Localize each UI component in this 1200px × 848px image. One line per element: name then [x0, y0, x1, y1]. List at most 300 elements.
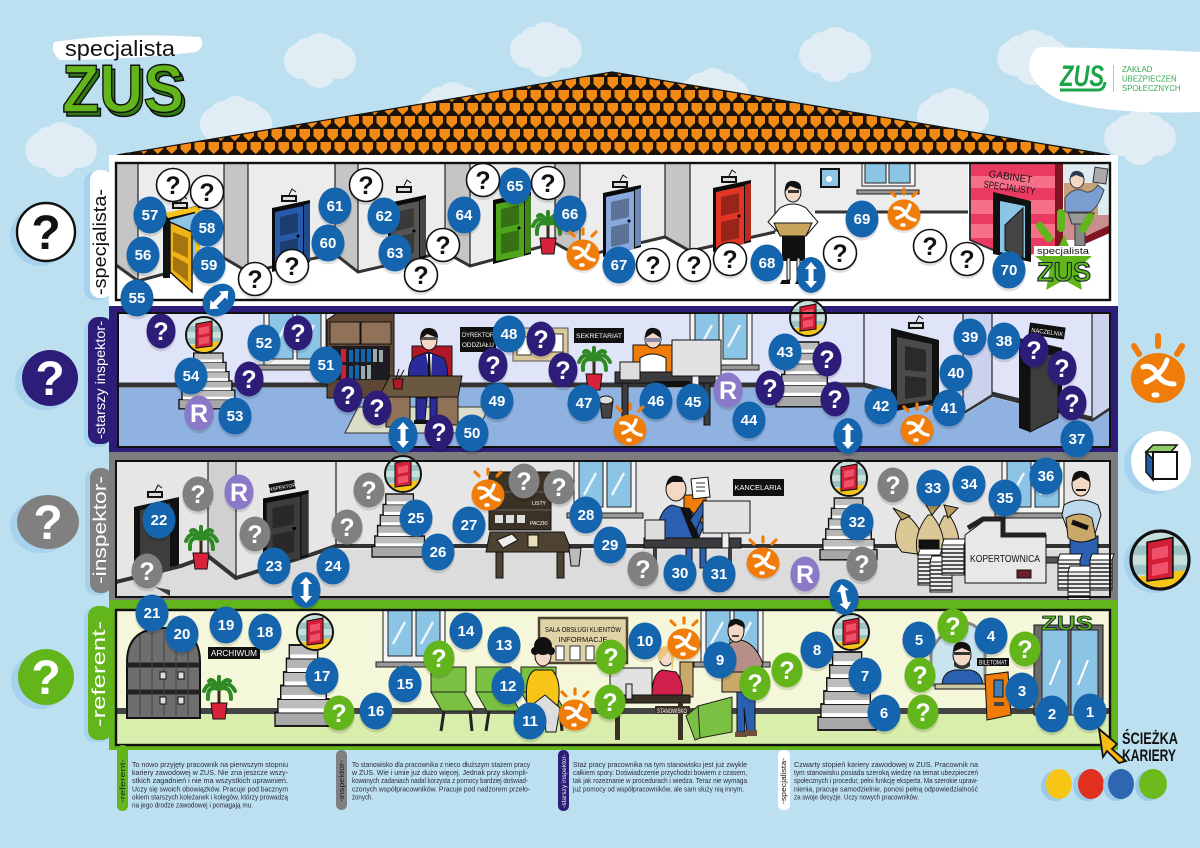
person: woman with box [768, 181, 818, 284]
mail sacks [893, 505, 959, 556]
logo: Zakład Ubezpieczeń Społecznych: ZAKŁAD [1122, 65, 1153, 74]
waste bin [569, 548, 581, 566]
marker 38 [987, 322, 1021, 362]
question marker [404, 258, 438, 295]
description: referent: stkich zagadnień i nie ma wszystkich uprawnień. [132, 776, 288, 785]
floor: starszy inspektor [109, 300, 1118, 453]
stairs [179, 353, 238, 409]
description: specjalista: Czwarty stopień kariery zawodowej w ZUS. Pracownik na [794, 760, 979, 769]
question marker: ? [603, 644, 619, 672]
marker 30: 30 [672, 565, 688, 582]
question marker: ? [747, 670, 763, 698]
question marker [323, 696, 355, 734]
question marker: ? [290, 320, 306, 348]
marker 50: 50 [464, 425, 480, 442]
marker 54 [174, 358, 208, 398]
entrance glass doors [1034, 625, 1103, 715]
door: blue [272, 189, 310, 272]
promotion arrow [388, 417, 418, 456]
letter stacks [918, 539, 966, 592]
picture [821, 169, 839, 187]
question marker: ? [635, 556, 651, 584]
question marker [156, 168, 190, 205]
question marker [739, 666, 771, 704]
description: inspektor: czonych współpracowników. Pracuje pod nadzorem przeło- [352, 784, 530, 794]
question marker: ? [854, 551, 870, 579]
R marker: R [190, 400, 208, 428]
table [486, 532, 572, 578]
question marker: ? [331, 700, 347, 728]
description: referent: na jego drodze zawodowej i pomagają mu. [132, 800, 253, 810]
question marker: ? [885, 472, 901, 500]
promotion arrow [291, 572, 321, 610]
legend: white question [10, 203, 75, 266]
question marker [508, 464, 540, 502]
question marker [713, 242, 747, 279]
window [694, 610, 770, 667]
marker 8 [800, 632, 834, 672]
legend: door portal [1124, 531, 1189, 593]
marker 30 [663, 554, 697, 594]
description: starszy inspektor: tak jak rozeznanie w procedurach i wiedza. Teraz nie wymaga [573, 776, 748, 785]
level tab: referent [84, 606, 112, 742]
question marker: ? [435, 232, 451, 260]
question marker: ? [153, 318, 169, 346]
R marker [224, 474, 254, 512]
question marker [913, 230, 947, 266]
tag: specjalista: -specjalista- [779, 757, 788, 804]
question marker: ? [199, 179, 215, 207]
marker 20: 20 [174, 626, 190, 643]
marker 15: 15 [397, 676, 413, 693]
question marker [755, 370, 785, 408]
question marker [548, 352, 578, 390]
marker 51: 51 [318, 357, 334, 374]
marker 34 [952, 466, 986, 506]
marker 23 [257, 548, 291, 588]
machine: kopertownica: KOPERTOWNICA [970, 554, 1040, 565]
question marker: ? [551, 474, 567, 502]
question marker [466, 164, 500, 200]
question marker: ? [1017, 636, 1033, 664]
marker 6: 6 [880, 705, 888, 722]
ZUS sign on entrance: ZUS [1041, 613, 1093, 635]
question marker [636, 248, 670, 285]
sign: biletomat: BILETOMAT [979, 660, 1007, 666]
window [995, 461, 1071, 518]
mini logo: star: specjalista [1037, 246, 1089, 256]
tag: inspektor [336, 750, 347, 810]
marker 3: 3 [1018, 683, 1026, 700]
marker 27: 27 [461, 517, 477, 534]
question marker [238, 262, 272, 299]
marker 42: 42 [873, 398, 889, 415]
legend: purple question [15, 350, 78, 410]
marker 42 [864, 388, 898, 428]
marker 20 [165, 616, 199, 656]
question marker [283, 316, 313, 354]
portal [833, 614, 869, 650]
legend: cube [1124, 431, 1191, 494]
marker 2: 2 [1048, 706, 1056, 723]
door: black [891, 316, 939, 412]
door: yellow, open [163, 196, 200, 292]
marker 52 [247, 324, 281, 364]
question marker: ? [247, 266, 263, 294]
question marker: ? [413, 262, 429, 290]
marker 61 [318, 188, 352, 228]
marker 56: 56 [135, 247, 151, 264]
marker 38: 38 [996, 333, 1012, 350]
trap marker [566, 229, 600, 273]
description: specjalista: społecznych i procedur, pełni funkcję eksperta. Ma szerokie upraw- [794, 776, 978, 785]
portal [186, 317, 222, 353]
stairs [372, 494, 427, 557]
marker 66: 66 [562, 206, 578, 223]
question marker [907, 694, 939, 732]
question marker: ? [190, 481, 206, 509]
marker 55 [120, 280, 154, 320]
marker 18: 18 [257, 624, 273, 641]
sign: archiwum: ARCHIWUM [211, 649, 257, 658]
question marker [1009, 632, 1041, 670]
question marker: ? [431, 645, 447, 673]
marker 26 [421, 534, 455, 574]
legend: green question [11, 649, 74, 709]
waste bin [599, 396, 613, 418]
promotion arrow [796, 257, 826, 296]
marker 69 [845, 200, 879, 240]
marker 62 [367, 198, 401, 238]
career path label [1122, 729, 1178, 765]
marker 37: 37 [1069, 431, 1085, 448]
legend: green question: ? [31, 652, 61, 705]
tag: inspektor: -inspektor- [337, 759, 346, 802]
floor: specjalista [109, 155, 1118, 307]
question marker: ? [485, 352, 501, 380]
marker 25 [399, 500, 433, 540]
description: referent: To nowo przyjęty pracownik na pierwszym stopniu [132, 760, 288, 769]
marker 69: 69 [854, 211, 870, 228]
question marker [333, 378, 363, 416]
question marker: ? [945, 613, 961, 641]
marker 16: 16 [368, 703, 384, 720]
marker 6 [867, 694, 901, 734]
gabinet specjalisty [970, 163, 1063, 262]
description: referent: okiem starszych koleżanek i kolegów, którzy prowadzą [132, 792, 289, 802]
question marker [877, 468, 909, 506]
level tab: referent: -referent- [89, 621, 109, 727]
question marker: ? [915, 699, 931, 727]
seated woman [526, 637, 560, 732]
tag: referent [117, 745, 128, 811]
sign: naczelnik [1028, 323, 1066, 339]
description: starszy inspektor: już pomocy od współpracowników, ale sam służy nią innym. [572, 784, 744, 794]
question marker: ? [431, 419, 447, 447]
marker 70: 70 [1001, 262, 1017, 279]
marker 36 [1029, 458, 1063, 498]
stairs [776, 342, 833, 407]
marker 4 [974, 618, 1008, 658]
marker 14: 14 [458, 623, 475, 640]
question marker: ? [340, 382, 356, 410]
roof [117, 72, 1110, 155]
markers: inspektor [131, 458, 1063, 620]
marker 28 [569, 496, 603, 536]
question marker: ? [475, 167, 491, 195]
question marker [820, 382, 850, 420]
sign: archiwum [208, 647, 260, 659]
mail shelf: PACZKI [530, 521, 548, 527]
marker 10 [628, 622, 662, 662]
question marker [1019, 332, 1049, 370]
marker 44 [732, 402, 766, 442]
R marker [184, 396, 214, 434]
career path label: ŚCIEŻKA [1122, 729, 1178, 748]
gabinet specjalisty: GABINET [988, 169, 1033, 186]
question marker [239, 516, 271, 554]
mini logo: star [1034, 213, 1092, 290]
markers: specjalista [120, 164, 1026, 325]
description: inspektor: w ZUS. Wie i umie już dużo więcej. Jednak przy skompli- [351, 768, 529, 777]
marker 46: 46 [648, 393, 664, 410]
marker 65: 65 [507, 178, 523, 195]
gabinet specjalisty: SPECJALISTY [983, 179, 1036, 198]
question marker: ? [241, 366, 257, 394]
sign: naczelnik: NACZELNIK [1031, 328, 1063, 338]
marker 17: 17 [314, 668, 330, 685]
question marker [353, 472, 385, 510]
notice board [513, 328, 568, 361]
promotion arrow [194, 277, 242, 325]
door: light blue [603, 175, 641, 257]
marker 57: 57 [142, 207, 158, 224]
left legend: career levels [10, 170, 112, 742]
level tab: specjalista: -specjalista- [90, 189, 110, 295]
question marker [543, 470, 575, 508]
question marker: ? [827, 386, 843, 414]
plant [533, 212, 564, 254]
machine: kopertownica [965, 519, 1061, 583]
marker 31 [702, 556, 736, 596]
floor: referent [109, 600, 1118, 750]
marker 53 [218, 398, 252, 438]
ticket window [931, 623, 987, 689]
legend: grey question: ? [33, 497, 63, 550]
marker 9: 9 [716, 652, 724, 669]
R marker: R [230, 479, 248, 507]
stairs [820, 498, 877, 560]
marker 17 [305, 658, 339, 698]
markers: starszy inspektor [146, 314, 1094, 460]
sign: dyrektor oddziału [460, 327, 496, 352]
legend: white question: ? [31, 207, 61, 260]
clouds [25, 22, 1176, 177]
question marker: ? [819, 346, 835, 374]
marker 58: 58 [199, 220, 215, 237]
description: specjalista: za swoje decyzje. Uczy nowych pracowników. [794, 792, 919, 802]
promotion arrow [826, 576, 863, 620]
description: referent: kariery zawodowej w ZUS. Nie zna jeszcze wszy- [132, 768, 289, 777]
marker 45: 45 [685, 394, 701, 411]
marker 60: 60 [320, 235, 336, 252]
arched archive door [127, 628, 200, 718]
question marker [627, 552, 659, 590]
marker 56 [126, 236, 160, 276]
marker 50 [455, 414, 489, 454]
question marker [937, 608, 969, 646]
marker 7: 7 [861, 668, 869, 685]
mini logo: star: ZUS [1037, 257, 1091, 287]
stairs [275, 645, 332, 726]
question marker [182, 476, 214, 514]
question marker: ? [361, 477, 377, 505]
marker 62: 62 [376, 208, 392, 225]
door: green [493, 192, 531, 264]
sign: kancelaria [733, 479, 784, 496]
question marker [594, 684, 626, 722]
marker 60 [311, 224, 345, 264]
ticket machine [985, 672, 1011, 720]
question marker: ? [832, 240, 848, 268]
reception desk with clerk [608, 646, 693, 740]
floor: inspektor [109, 452, 1118, 605]
description: referent [117, 745, 289, 811]
sign: kancelaria: KANCELARIA [734, 485, 782, 492]
question marker: ? [533, 326, 549, 354]
marker 33 [916, 470, 950, 510]
marker 48 [492, 316, 526, 356]
marker 33: 33 [925, 480, 941, 497]
marker 31: 31 [711, 566, 727, 583]
question marker [1047, 350, 1077, 388]
marker 64 [447, 196, 481, 236]
question marker [190, 176, 224, 212]
level tab: specjalista [84, 170, 112, 300]
marker 1: 1 [1086, 704, 1094, 721]
marker 32: 32 [849, 514, 865, 531]
right legend [1124, 336, 1191, 593]
logo: Zakład Ubezpieczeń Społecznych [1029, 47, 1200, 112]
sign: biletomat [977, 658, 1009, 666]
door: inspektor [263, 490, 309, 567]
notice board: sala obsługi klientów: SALA OBSŁUGI KLIENTÓW [545, 625, 622, 634]
marker 2 [1035, 696, 1069, 736]
marker 39: 39 [962, 329, 978, 346]
secretary desk and computer [615, 328, 721, 425]
notice board: sala obsługi klientów: INFORMACJE [559, 635, 607, 644]
sign: dyrektor oddziału: ODDZIAŁU [462, 343, 494, 349]
marker 47: 47 [576, 395, 592, 412]
marker 15 [388, 666, 422, 706]
letter stacks [1058, 554, 1114, 602]
window [257, 313, 333, 370]
question marker [950, 242, 984, 279]
question marker: ? [339, 514, 355, 542]
marker 34: 34 [961, 476, 978, 493]
question marker [771, 652, 803, 690]
plant [579, 348, 610, 390]
bookcase [327, 313, 394, 398]
window [376, 610, 452, 667]
marker 19 [209, 606, 243, 646]
question marker: ? [912, 662, 928, 690]
plant [204, 677, 235, 719]
question marker [234, 362, 264, 400]
question marker [426, 228, 460, 265]
sign: inspektor: INSPEKTOR [267, 482, 297, 493]
question marker [812, 342, 842, 380]
marker 41 [932, 390, 966, 430]
question marker [275, 250, 309, 286]
marker 13: 13 [496, 637, 512, 654]
question marker [846, 546, 878, 584]
marker 32 [840, 504, 874, 544]
trap marker [558, 689, 592, 733]
marker 11 [513, 702, 547, 742]
sign: dyrektor oddziału: DYREKTOR [462, 333, 495, 339]
sign: sekretariat: SEKRETARIAT [576, 334, 622, 340]
marker 64: 64 [456, 207, 473, 224]
question marker [331, 510, 363, 548]
question marker: ? [516, 468, 532, 496]
notice board: sala obsługi klientów [539, 618, 627, 663]
description: inspektor: żonych. [352, 792, 373, 802]
trap marker [746, 537, 780, 581]
question marker: ? [284, 253, 300, 281]
question marker [478, 348, 508, 386]
door: red [713, 170, 751, 252]
description: inspektor [336, 750, 530, 810]
office with specialist at podium [1063, 163, 1110, 247]
legend: grey question [10, 495, 79, 553]
question marker [531, 166, 565, 203]
marker 63 [378, 234, 412, 274]
trap marker [887, 189, 921, 233]
question marker [423, 640, 455, 678]
question marker: ? [165, 172, 181, 200]
career path label: KARIERY [1122, 746, 1176, 765]
marker 21: 21 [144, 605, 160, 622]
trap marker [471, 469, 505, 513]
logo: specjalista ZUS: specjalista [65, 36, 176, 61]
question marker [526, 322, 556, 360]
question marker [823, 236, 857, 273]
marker 68 [750, 244, 784, 284]
level tab: inspektor [85, 468, 112, 595]
mail shelf: LISTY [532, 501, 547, 507]
marker 13 [487, 626, 521, 666]
question marker: ? [922, 233, 938, 261]
marker 43 [768, 334, 802, 374]
marker 23: 23 [266, 558, 282, 575]
worker with package [1062, 471, 1101, 570]
marker 46 [639, 382, 673, 422]
portal [790, 300, 826, 336]
question marker: ? [369, 395, 385, 423]
marker 59: 59 [201, 257, 217, 274]
marker 8: 8 [813, 642, 821, 659]
stairs [818, 652, 876, 730]
logo: Zakład Ubezpieczeń Społecznych: ZUS [1059, 60, 1104, 93]
marker 29: 29 [602, 537, 618, 554]
R marker: R [719, 377, 737, 405]
description: inspektor: kowanych zadaniach nadal korzysta z pomocy bardziej doświad- [352, 776, 528, 785]
trap marker [613, 404, 647, 448]
portal [385, 456, 421, 492]
question marker: ? [602, 689, 618, 717]
marker 44: 44 [741, 412, 758, 429]
